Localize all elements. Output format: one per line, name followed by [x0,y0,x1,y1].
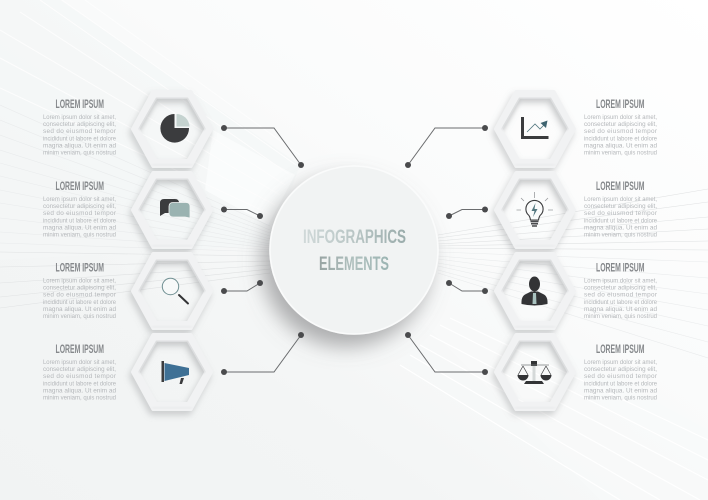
text block: left 2: consectetur adipiscing elit, [43,203,116,210]
text block: right 1: Lorem ipsum dolor sit amet, [584,114,657,121]
connector lines [224,128,485,372]
icon: businessman [521,276,548,306]
text block: right 1: consectetur adipiscing elit, [584,121,657,128]
text block: left 3: magna aliqua. Ut enim ad [43,306,116,313]
text block: left 2: minim veniam, quis nostrud [43,232,116,238]
hexagon: right 2 [496,172,574,248]
text block: right 4: Lorem ipsum dolor sit amet, [584,359,657,366]
icon: light bulb [516,192,553,226]
center title: ELEMENTS [319,254,389,275]
text block: left 4: incididunt ut labore et dolore [43,380,116,388]
text block: right 2 [584,179,658,238]
hexagon: left 2 [132,172,212,248]
hexagon: left 4 [132,334,212,410]
text block: right 3: magna aliqua. Ut enim ad [584,306,657,313]
text block: right 3: sed do eiusmod tempor [584,292,658,298]
center circle [270,166,438,334]
text block: left 4: minim veniam, quis nostrud [43,394,116,402]
text block: right 3: Lorem ipsum dolor sit amet, [584,278,657,284]
text block: right 1: sed do eiusmod tempor [584,128,658,135]
text block: left 3: LOREM IPSUM [56,260,104,274]
text block: left 2: Lorem ipsum dolor sit amet, [43,196,116,203]
text block: left 3: incididunt ut labore et dolore [43,299,116,306]
text block: right 1: LOREM IPSUM [596,97,644,111]
icon: speech bubbles [160,199,190,218]
text block: left 1: incididunt ut labore et dolore [43,136,116,142]
text block: left 4: LOREM IPSUM [56,342,104,356]
center title: INFOGRAPHICS [303,227,406,248]
text block: right 2: sed do eiusmod tempor [584,210,658,217]
hexagon: right 1 [496,92,574,166]
text block: right 3 [584,260,658,320]
text block: left 3: minim veniam, quis nostrud [43,313,116,320]
hexagon: right 3 [496,254,574,328]
text block: left 2: incididunt ut labore et dolore [43,218,116,224]
hexagon: right 4 [496,334,574,410]
text block: left 1: consectetur adipiscing elit, [43,121,116,128]
text block: left 4: sed do eiusmod tempor [43,373,117,380]
text block: right 2: consectetur adipiscing elit, [584,203,657,210]
text block: right 2: magna aliqua. Ut enim ad [584,224,657,232]
text block: right 4: magna aliqua. Ut enim ad [584,388,657,394]
text block: right 1: minim veniam, quis nostrud [584,150,657,156]
text block: right 4 [584,342,658,402]
icon: megaphone [162,361,189,384]
text block: right 1: incididunt ut labore et dolore [584,136,657,142]
hexagon: left 1 [132,92,212,166]
text block: left 1 [43,97,117,156]
text block: left 1: magna aliqua. Ut enim ad [43,142,116,150]
icon: pie chart [160,114,190,143]
icon: line chart [521,117,548,139]
text block: left 4: magna aliqua. Ut enim ad [43,388,116,394]
text block: left 4 [43,342,117,402]
text block: right 4: sed do eiusmod tempor [584,373,658,380]
text block: right 2: incididunt ut labore et dolore [584,218,657,224]
icon: magnifying glass [162,278,188,304]
text block: left 1: LOREM IPSUM [56,97,104,111]
text block: left 1: minim veniam, quis nostrud [43,150,116,156]
text block: left 2: sed do eiusmod tempor [43,210,117,217]
text block: right 2: minim veniam, quis nostrud [584,232,657,238]
icon: scales [518,361,552,384]
text block: right 3: minim veniam, quis nostrud [584,313,657,320]
text block: left 1: sed do eiusmod tempor [43,128,117,135]
text block: right 2: Lorem ipsum dolor sit amet, [584,196,657,203]
text block: left 3 [43,260,117,320]
hexagon: left 3 [132,254,212,328]
text block: right 1: magna aliqua. Ut enim ad [584,142,657,150]
text block: right 4: minim veniam, quis nostrud [584,394,657,402]
text block: left 4: consectetur adipiscing elit, [43,366,116,373]
text block: left 3: Lorem ipsum dolor sit amet, [43,278,116,284]
text block: right 4: consectetur adipiscing elit, [584,366,657,373]
text block: left 3: consectetur adipiscing elit, [43,284,116,292]
text block: right 2: LOREM IPSUM [596,179,644,193]
text block: right 3: incididunt ut labore et dolore [584,299,657,306]
text block: right 3: LOREM IPSUM [596,260,644,274]
text block: right 3: consectetur adipiscing elit, [584,284,657,292]
text block: left 2: LOREM IPSUM [56,179,104,193]
center title [303,227,406,275]
text block: left 1: Lorem ipsum dolor sit amet, [43,114,116,121]
text block: right 4: incididunt ut labore et dolore [584,380,657,388]
connector dots [221,125,488,375]
text block: left 2: magna aliqua. Ut enim ad [43,224,116,232]
text block: right 1 [584,97,658,156]
text block: left 2 [43,179,117,238]
text block: left 4: Lorem ipsum dolor sit amet, [43,359,116,366]
text block: right 4: LOREM IPSUM [596,342,644,356]
text block: left 3: sed do eiusmod tempor [43,292,117,298]
